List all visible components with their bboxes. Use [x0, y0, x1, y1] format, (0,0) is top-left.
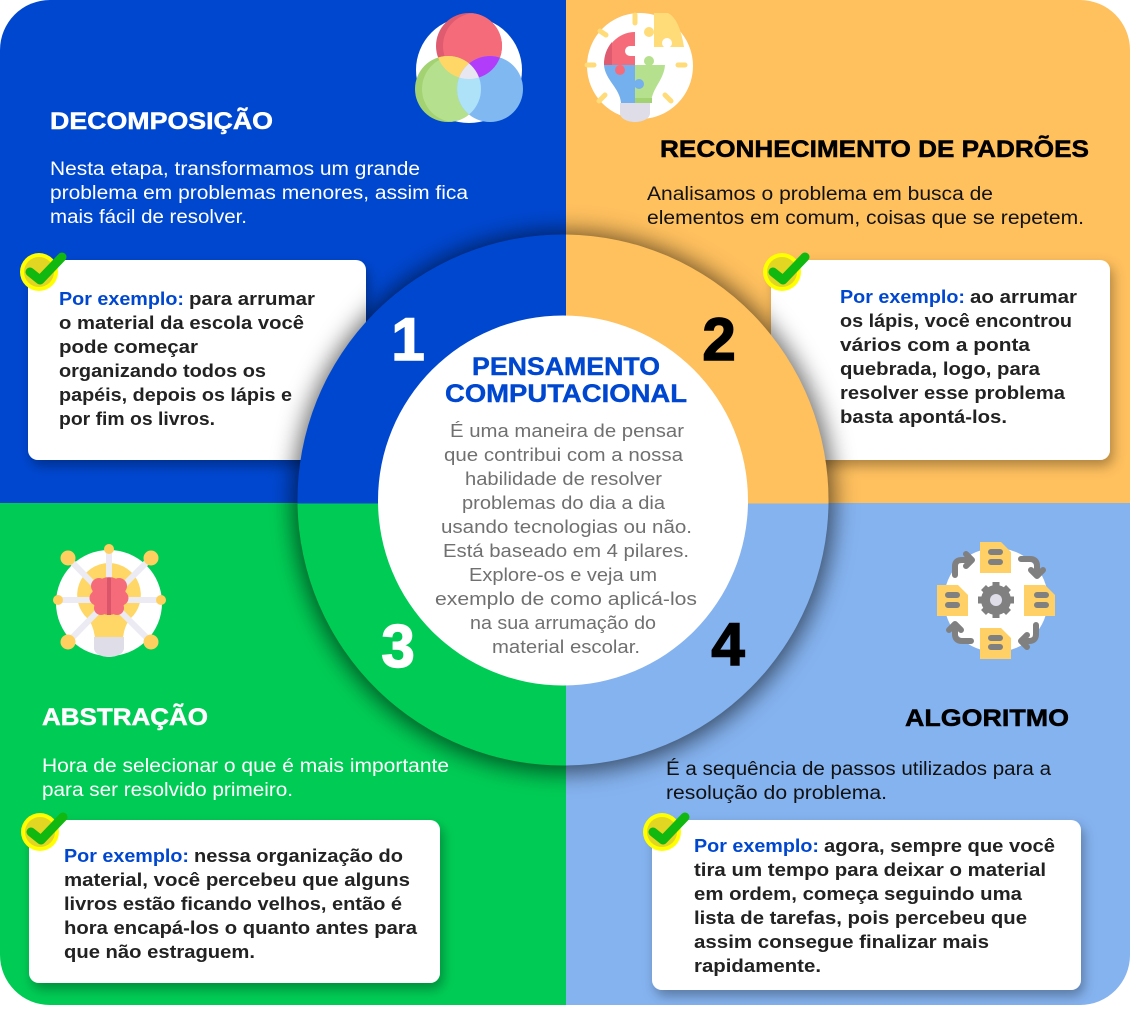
card: algoritmo example: agora, sempre que você [824, 835, 1055, 856]
card: algoritmo example: em ordem, começa seguindo uma [694, 883, 1023, 904]
center heading [445, 353, 687, 408]
card: reconhecimento example: resolver esse problema [840, 382, 1066, 403]
text: decomposição [50, 159, 468, 228]
panel: decomposição background [0, 0, 566, 503]
card: abstração example: Por exemplo: [64, 845, 189, 866]
card: decomposição example: o material da escola você [59, 312, 304, 333]
card: decomposição example: organizando todos os [59, 360, 266, 381]
center description: material escolar. [492, 636, 640, 657]
heading: algoritmo: ALGORITMO [905, 705, 1069, 732]
center description: Explore-os e veja um [469, 564, 657, 585]
heading: decomposição: DECOMPOSIÇÃO [50, 107, 273, 135]
card: abstração example: que não estraguem. [64, 941, 255, 962]
center description: É uma maneira de pensar [450, 420, 684, 441]
center description: habilidade de resolver [465, 468, 662, 489]
card: algoritmo example [652, 820, 1081, 990]
text: abstração [42, 756, 449, 801]
icon: check badge 1 [20, 253, 62, 291]
text: decomposição: Nesta etapa, transformamos um grande [50, 159, 420, 180]
icon: venn diagram [415, 13, 523, 123]
text: algoritmo: É a sequência de passos utilizados para a [666, 759, 1051, 780]
panel: abstração background [0, 503, 566, 1013]
center description: exemplo de como aplicá-los [435, 588, 697, 609]
card: decomposição example: para arrumar [189, 288, 315, 309]
card: decomposição example: Por exemplo: [59, 288, 184, 309]
text: abstração: para ser resolvido primeiro. [42, 780, 293, 801]
card: decomposição example: papéis, depois os lápis e [59, 384, 292, 405]
center description: na sua arrumação do [470, 612, 656, 633]
card: abstração example: material, você percebeu que alguns [64, 869, 410, 890]
central ring with four quadrants [297, 234, 829, 766]
text: algoritmo [666, 759, 1051, 804]
number 4: 4 [711, 611, 745, 678]
icon: puzzle light bulb [587, 13, 693, 122]
center description: Está baseado em 4 pilares. [443, 540, 689, 561]
card: reconhecimento example: ao arrumar [970, 286, 1077, 307]
card: decomposição example: por fim os livros. [59, 408, 215, 429]
card: abstração example: nessa organização do [194, 845, 403, 866]
center description [435, 420, 697, 657]
card: algoritmo example: tira um tempo para deixar o material [694, 859, 1046, 880]
text: decomposição: mais fácil de resolver. [50, 207, 247, 228]
center description: usando tecnologias ou não. [441, 516, 692, 537]
card: abstração example: hora encapá-los o quanto antes para [64, 917, 418, 938]
card: reconhecimento example: Por exemplo: [840, 286, 965, 307]
icon: brain light bulb [53, 544, 166, 657]
card: reconhecimento example: basta apontá-los. [840, 406, 1007, 427]
text: reconhecimento [647, 184, 1084, 229]
card: algoritmo example: assim consegue finalizar mais [694, 931, 989, 952]
card: abstração example [29, 820, 440, 983]
text: reconhecimento: elementos em comum, coisas que se repetem. [647, 208, 1084, 229]
text: decomposição: problema em problemas menores, assim fica [50, 183, 468, 204]
card: algoritmo example: rapidamente. [694, 955, 821, 976]
card: reconhecimento example: os lápis, você encontrou [840, 310, 1072, 331]
card: reconhecimento example: quebrada, logo, para [840, 358, 1041, 379]
text: reconhecimento: Analisamos o problema em busca de [647, 184, 993, 205]
text: algoritmo: resolução do problema. [666, 783, 887, 804]
icon: check badge 4 [643, 813, 685, 851]
card: reconhecimento example [771, 260, 1110, 460]
card: algoritmo example: Por exemplo: [694, 835, 819, 856]
center circle [378, 316, 748, 686]
card: decomposição example [28, 260, 366, 460]
icon: check badge 3 [21, 813, 63, 851]
panel: algoritmo background [566, 503, 1132, 1013]
text: abstração: Hora de selecionar o que é mais importante [42, 756, 449, 777]
center heading: PENSAMENTO [472, 353, 660, 381]
icon: algorithm cycle [937, 542, 1055, 659]
heading: abstração: ABSTRAÇÃO [42, 703, 208, 731]
center heading: COMPUTACIONAL [445, 380, 687, 408]
center description: problemas do dia a dia [462, 492, 666, 513]
icon: check badge 2 [763, 253, 805, 291]
number 2: 2 [702, 306, 736, 373]
card: reconhecimento example: vários com a ponta [840, 334, 1031, 355]
heading: reconhecimento de padrões: RECONHECIMENTO DE PADRÕES [660, 135, 1089, 163]
card: abstração example: livros estão ficando velhos, então é [64, 893, 402, 914]
number 3: 3 [381, 613, 415, 680]
card: decomposição example: pode começar [59, 336, 198, 357]
card: algoritmo example: lista de tarefas, pois percebeu que [694, 907, 1027, 928]
ring shadow over all panels [294, 232, 834, 772]
panel: reconhecimento de padrões background [566, 0, 1132, 503]
center description: que contribui com a nossa [444, 444, 684, 465]
number 1: 1 [391, 306, 425, 373]
